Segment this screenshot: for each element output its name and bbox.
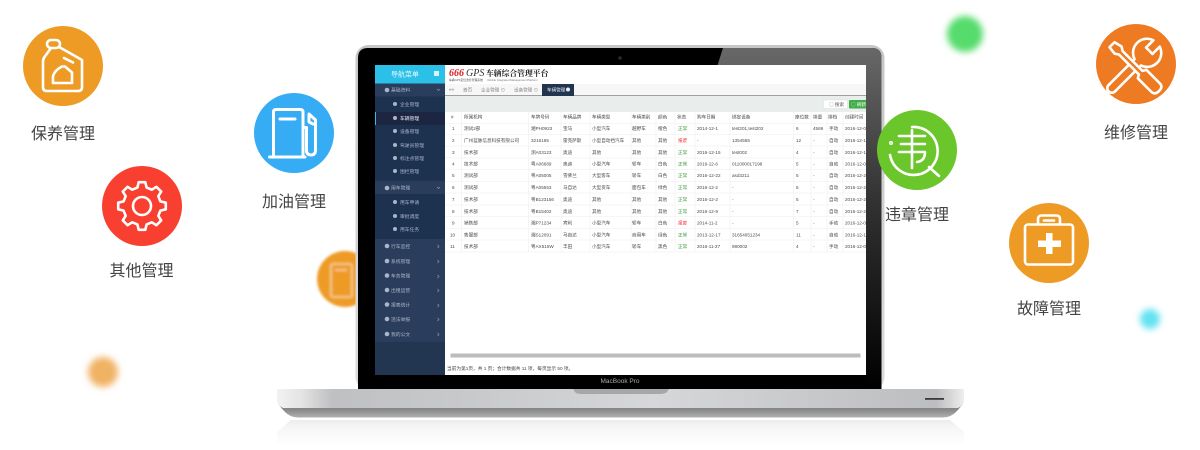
table header: 绑定设备 [732, 114, 751, 120]
table rows: 广州蓝脉信息科技有限公司 [464, 137, 520, 144]
base shadow underside [278, 404, 963, 418]
laptop bezel [358, 48, 882, 389]
table rows: 粤A06689 [531, 160, 552, 168]
sidebar: 用车申请 [400, 199, 419, 206]
table rows: 技术部 [464, 208, 478, 215]
menu items [385, 88, 389, 92]
table header [451, 114, 863, 120]
table rows: 技术部 [464, 243, 478, 250]
pagination text: 当前为第1页，共 1 页；合计数据共 11 项，每页显示 50 项。 [447, 365, 573, 372]
tab bar: «« [449, 87, 455, 92]
table [445, 112, 866, 252]
table rows: 2014-11-2 [697, 220, 718, 226]
screen [375, 65, 867, 375]
table rows: - [813, 162, 815, 166]
table rows: 轿车 [632, 160, 642, 168]
table rows: - [813, 173, 815, 178]
table rows: 轿车 [632, 243, 642, 250]
table rows: 其他 [632, 196, 642, 203]
icon: wrench and screwdriver [1099, 33, 1167, 101]
table rows: 小型汽车 [592, 243, 611, 250]
platform logo: GPS [466, 68, 484, 79]
table rows: 10 [450, 232, 456, 238]
tab bar [445, 84, 866, 96]
table rows: 面包车 [632, 184, 646, 191]
table rows: 11 [796, 232, 801, 238]
refresh button [849, 100, 867, 108]
sidebar: 行车监控 [391, 243, 410, 250]
table rows: 其他 [592, 196, 602, 203]
table header: 车辆类型 [592, 114, 611, 120]
table rows [450, 125, 866, 250]
table rows: 雷克萨斯 [563, 137, 582, 144]
table rows: 自动 [829, 137, 839, 144]
table header: 车辆品牌 [563, 114, 582, 120]
table rows: 正常 [678, 243, 688, 250]
table rows: 粤B15402 [531, 208, 552, 215]
table rows: 宝马 [563, 125, 573, 132]
table rows: 2016-12-1 [845, 150, 866, 155]
platform logo: Vehicle Integrated Management Platform [487, 78, 538, 82]
tab bar: 企业管理 ⊙ [481, 86, 505, 94]
table rows: 其他 [658, 137, 668, 144]
brand label: MacBook Pro [600, 378, 640, 385]
label: 其他管理 [109, 262, 174, 280]
table rows: 粤B123156 [531, 196, 554, 203]
platform logo: 666 [449, 68, 464, 79]
horizontal scrollbar [450, 354, 860, 358]
platform logo [449, 68, 549, 82]
sidebar: 我的公文 [391, 331, 410, 338]
table rows: 轿车 [632, 172, 642, 179]
table rows: - [813, 232, 815, 238]
table rows: 丰田 [563, 243, 573, 250]
table rows: 湘S12091 [531, 232, 552, 238]
table rows: 正常 [678, 149, 688, 156]
table rows: 其他 [658, 149, 668, 156]
table rows: 橙色 [658, 125, 668, 132]
table rows: 湘P71234 [531, 220, 552, 226]
table rows: test002 [732, 150, 748, 155]
table rows: 测试部 [464, 172, 478, 179]
table rows: 马自达 [563, 184, 577, 191]
sidebar: 设备管理 [400, 128, 419, 135]
table rows: 2016-12-2 [697, 197, 718, 202]
sidebar: 用车管理 [391, 185, 410, 192]
table rows: 正常 [678, 160, 688, 168]
table rows: 自动 [829, 172, 839, 179]
table rows: 正常 [678, 184, 688, 191]
table rows: 011000017198 [732, 162, 763, 166]
laptop lid [356, 45, 884, 390]
item: 违章管理 [877, 110, 957, 224]
table rows: 2016-12-2 [697, 185, 718, 190]
sidebar: 基础资料 [391, 86, 410, 94]
table rows: 测A03123 [531, 149, 552, 156]
table rows: test201,test202 [732, 126, 764, 131]
table rows: - [813, 197, 815, 202]
table rows: 6 [452, 185, 455, 190]
table rows: 2016-12-2 [845, 173, 866, 178]
table rows: 白色 [658, 160, 668, 168]
table rows: 正常 [678, 125, 688, 132]
decorative blurred orange dot [88, 357, 118, 387]
table rows: asd3211 [732, 173, 750, 178]
toolbar [445, 96, 867, 112]
sidebar: 用车任务 [400, 226, 419, 233]
hinge notch [573, 389, 669, 394]
table rows: 31654051234 [732, 232, 761, 238]
table rows: 其他 [658, 196, 668, 203]
table rows: 湘PH0923 [531, 125, 553, 132]
table rows: 小型汽车 [592, 220, 611, 226]
sidebar: 车辆管理 [400, 115, 419, 122]
sidebar [375, 65, 445, 375]
table rows: 白色 [658, 220, 668, 226]
table rows: 技术部 [464, 160, 478, 168]
icon: gear [118, 182, 166, 230]
table rows: 2 [452, 138, 455, 143]
tab bar: 设备管理 ⊙ [514, 86, 538, 94]
table rows: 7 [796, 209, 799, 214]
sidebar: 出租运营 [391, 287, 410, 294]
table header: 座位数 [795, 114, 809, 120]
table rows: 2016-12-1 [845, 232, 866, 238]
table rows: 2016-12-1 [845, 138, 866, 143]
sidebar: 车务管理 [391, 272, 410, 279]
tab bar: 车辆管理 [547, 86, 566, 94]
table rows: 4569 [813, 126, 824, 131]
label: 保养管理 [31, 125, 95, 143]
table rows: 4 [452, 162, 455, 166]
table rows: 2016-11-27 [697, 244, 721, 249]
item: 其他管理 [102, 166, 182, 280]
table rows: 手动 [829, 220, 839, 226]
label: 加油管理 [262, 193, 326, 211]
icon: first aid kit [1025, 216, 1073, 264]
table rows: 3216165 [531, 138, 549, 143]
table rows: 正常 [678, 232, 688, 238]
power indicator [925, 398, 944, 400]
sidebar: 系统管理 [391, 258, 410, 265]
table rows: 奥迪 [563, 149, 573, 156]
platform logo: 车辆GPS定位监控管理系统 [449, 78, 483, 82]
table rows: 其他 [632, 137, 642, 144]
table rows: 绿色 [658, 184, 668, 190]
sidebar: 围栏管理 [400, 168, 419, 175]
table rows: 销售部 [464, 220, 478, 226]
item: 故障管理 [1009, 203, 1089, 318]
table rows: 2016-12-2 [845, 197, 866, 202]
table rows: 2016-12-0 [845, 162, 866, 166]
decorative blurred cyan dot [1140, 309, 1160, 329]
table rows: 粤A05553 [531, 184, 552, 191]
table rows: 雪佛兰 [563, 172, 577, 179]
table rows: - [813, 138, 815, 143]
table rows: 技术部 [464, 196, 478, 203]
table header: 颜色 [658, 114, 668, 120]
table rows: 5 [796, 162, 799, 166]
table rows: 980002 [732, 244, 748, 249]
sidebar: 驾驶员管理 [400, 142, 424, 149]
table rows: 5 [452, 173, 455, 178]
table rows: 黑色 [658, 243, 668, 250]
silver base [277, 389, 964, 408]
table rows: 测试2部 [464, 125, 481, 132]
table rows: 奥迪 [563, 196, 573, 203]
table rows: 粤A05005 [531, 172, 552, 179]
table rows: 报废 [678, 137, 688, 144]
table rows: 其他 [658, 208, 668, 215]
table rows: 奥迪 [563, 208, 573, 215]
bezel glare [718, 48, 882, 358]
table rows: 越野车 [632, 125, 646, 132]
table rows: - [813, 220, 815, 226]
table rows: 其他 [632, 149, 642, 156]
table rows: 手动 [829, 243, 839, 250]
table header: 创建时间 [845, 114, 864, 120]
table rows: 奥迪 [563, 160, 573, 168]
table rows: 5 [796, 173, 799, 178]
table header: 排量 [813, 114, 823, 120]
table rows: 小型汽车 [592, 125, 611, 132]
table rows: 技术部 [464, 149, 478, 156]
search button [824, 100, 848, 108]
table header: 购车日期 [697, 114, 716, 120]
table rows: 8 [452, 209, 455, 214]
tab bar: 首页 [463, 86, 473, 94]
label: 维修管理 [1104, 124, 1168, 142]
table rows: 商用车 [632, 232, 646, 238]
table grid [445, 112, 866, 252]
sidebar: 导航菜单 [391, 70, 419, 78]
table header: 车牌号码 [531, 114, 550, 120]
sidebar: 企业管理 [400, 101, 419, 108]
table rows: 自动 [829, 160, 839, 168]
table rows: 5 [796, 197, 799, 202]
table rows: 6 [796, 126, 799, 131]
table rows: - [732, 185, 734, 190]
table rows: 其他 [632, 208, 642, 215]
table rows: 大型货车 [592, 184, 611, 191]
table rows: 自动 [829, 196, 839, 203]
reflection [277, 420, 964, 446]
label: 故障管理 [1017, 300, 1081, 318]
table rows: 其他 [592, 208, 602, 215]
table rows: 2016-12-15 [697, 150, 721, 155]
sidebar: 违法举报 [391, 316, 410, 323]
table header: 车辆类别 [632, 114, 651, 120]
sidebar header [375, 65, 445, 84]
table rows: 自动 [829, 184, 839, 191]
table rows: 自动 [829, 208, 839, 215]
table rows: 粤AX515W [531, 243, 554, 250]
section backgrounds [375, 84, 445, 96]
table rows: 测试部 [464, 184, 478, 191]
table rows: 马自达 [563, 232, 577, 238]
item: 保养管理 [23, 26, 103, 143]
table rows: 2016-12-0 [845, 244, 866, 249]
table rows: 自动 [829, 232, 839, 238]
platform logo: 车辆综合管理平台 [486, 68, 549, 78]
table rows: 2013-12-17 [697, 232, 721, 238]
laptop [277, 45, 964, 446]
table rows: - [813, 244, 815, 249]
table rows: - [697, 138, 699, 143]
table rows: 绿色 [658, 232, 668, 238]
table rows: 4 [796, 150, 799, 155]
table rows: 2016-12-9 [697, 209, 718, 214]
table rows: 5 [796, 220, 799, 226]
table rows: 大型客车 [592, 172, 611, 179]
table rows: 1354565 [732, 138, 750, 143]
table rows: 12 [796, 138, 802, 143]
table rows: 小型汽车 [592, 232, 611, 238]
table rows: - [732, 197, 734, 202]
table rows: 宾利 [563, 220, 573, 226]
table rows: 5 [796, 185, 799, 190]
table rows: 2016-12-0 [845, 126, 866, 131]
table rows: 9 [452, 220, 455, 226]
table rows: 3 [452, 150, 455, 155]
table rows: 2016-12-2 [845, 209, 866, 214]
table header: # [451, 114, 454, 120]
decorative blurred green dot [947, 16, 983, 52]
table rows: 白色 [658, 172, 668, 179]
table rows: 2014-12-1 [697, 126, 718, 131]
table rows: 正常 [678, 172, 688, 179]
table rows: 正常 [678, 196, 688, 203]
table header: 排档 [828, 114, 838, 120]
table rows: 报废 [678, 220, 688, 226]
table rows: 2016-12-0 [845, 220, 866, 226]
sidebar: 标注点管理 [400, 155, 424, 162]
active tab [542, 84, 574, 96]
webcam [618, 56, 622, 60]
table header: 所属机构 [464, 114, 483, 120]
sidebar: 报表统计 [391, 301, 410, 308]
table rows: - [732, 220, 734, 226]
table rows: - [813, 209, 815, 214]
toolbar: ◯ 搜索 [829, 101, 844, 108]
table rows: - [813, 185, 815, 190]
table rows: 小型自动挡汽车 [592, 137, 625, 144]
table rows: 自动 [829, 149, 839, 156]
table rows: 7 [452, 197, 455, 202]
table rows: 小型汽车 [592, 160, 611, 168]
table rows: 11 [450, 244, 455, 249]
table rows: 4 [796, 244, 799, 249]
table rows: 手动 [829, 125, 839, 132]
item: 加油管理 [254, 93, 334, 211]
item: 维修管理 [1096, 24, 1176, 142]
sidebar: 审批调度 [400, 213, 419, 220]
table rows: - [813, 150, 815, 155]
table rows: 其他 [592, 149, 602, 156]
table rows: 正常 [678, 208, 688, 215]
label: 违章管理 [885, 206, 949, 224]
icon: fuel pump [270, 110, 316, 157]
table rows: 轿车 [632, 220, 642, 226]
icon: magnifier with character [890, 127, 939, 176]
table rows: 1 [452, 126, 455, 131]
toolbar: ◯ 刷新 [851, 101, 866, 108]
table rows: 售服部 [464, 232, 478, 238]
decorative blurred fuel icon [317, 251, 373, 307]
table rows: 2016-12-2 [845, 185, 866, 190]
icon: oil bottle [43, 40, 82, 91]
table rows: 2016-12-22 [697, 173, 721, 178]
table header: 状态 [677, 114, 687, 120]
table rows: 2016-12-6 [697, 162, 718, 166]
table rows: - [732, 209, 734, 214]
